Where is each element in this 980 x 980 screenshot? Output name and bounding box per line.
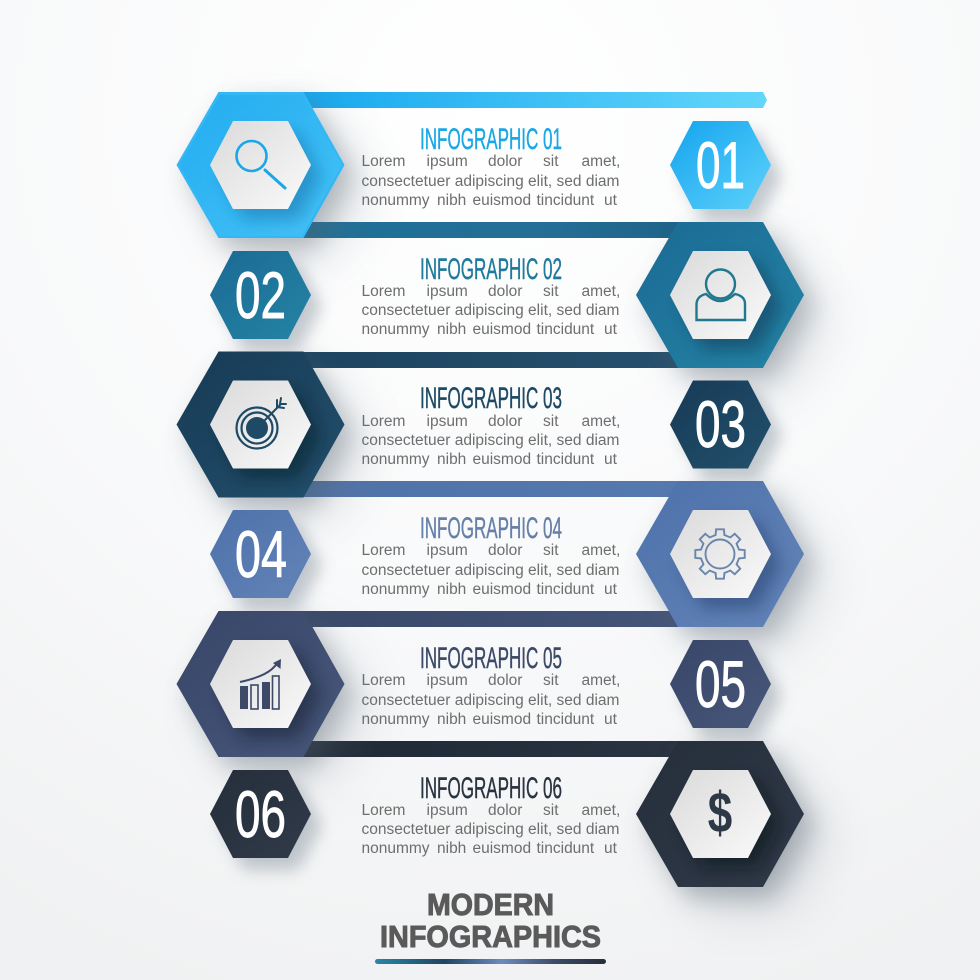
row 4 text block: Lorem (362, 542, 405, 559)
row 6 text block: ut (604, 840, 618, 857)
connector bar 3 (300, 352, 690, 368)
row 6 text block: INFOGRAPHIC 06 (420, 772, 562, 805)
row 1 right small number hexagon: 01 (696, 128, 745, 202)
row 3 right small number hexagon: 03 (695, 387, 746, 461)
row 1 text block: euismod (472, 192, 531, 209)
row 1 text block: sit (543, 153, 559, 170)
title underline (375, 959, 606, 964)
row 5 text block: nibh (437, 711, 466, 728)
icon: target (236, 398, 286, 448)
row 6 left small number hexagon: 06 (235, 777, 286, 851)
row 5 right small number hexagon (670, 640, 782, 740)
row 5 text block: nonummy (362, 711, 430, 728)
row 2 text block: ipsum (426, 283, 468, 300)
row 5 text block: euismod (472, 711, 531, 728)
row 1 text block: dolor (488, 153, 522, 170)
row 2 text block: euismod (472, 321, 531, 338)
row 4 text block: ipsum (426, 542, 468, 559)
row 5 text block: ut (604, 711, 618, 728)
row 2 text block: tincidunt (536, 321, 595, 338)
row 3 text block: tincidunt (536, 451, 595, 468)
row 3 text block: nonummy (362, 451, 430, 468)
row 1 text block (362, 123, 620, 209)
connector bar 6 (300, 741, 690, 757)
icon: dollar sign: $ (708, 780, 732, 844)
icon: gear (695, 529, 745, 579)
row 6 text block: tincidunt (536, 840, 595, 857)
row 2 left small number hexagon (210, 251, 322, 351)
row 2 text block: INFOGRAPHIC 02 (420, 253, 562, 286)
row 4 text block (362, 512, 620, 598)
icon: magnifier (236, 141, 285, 188)
row 6 text block: amet, (582, 802, 620, 819)
icon: growth chart (240, 659, 281, 709)
row 3 text block: nibh (437, 451, 466, 468)
row 5 text block: Lorem (362, 672, 405, 689)
row 2 text block: ut (604, 321, 618, 338)
row 5 text block: consectetuer adipiscing elit, sed diam (362, 692, 620, 709)
row 4 text block: amet, (582, 542, 620, 559)
row 1 left big hexagon with magnifier icon (176, 92, 369, 261)
row 3 text block: amet, (582, 413, 620, 430)
row 1 text block: consectetuer adipiscing elit, sed diam (362, 173, 620, 190)
icon: person (696, 270, 745, 320)
connector bar 5 (300, 611, 690, 627)
row 3 left big hexagon with target icon (176, 352, 369, 520)
row 5 text block: ipsum (426, 672, 468, 689)
row 2 right big hexagon with person icon (636, 222, 829, 391)
row 5 text block: dolor (488, 672, 522, 689)
row 3 text block: INFOGRAPHIC 03 (420, 382, 562, 415)
row 4 right big hexagon with gear icon (636, 481, 829, 650)
row 4 text block: euismod (472, 581, 531, 598)
row 4 text block: sit (543, 542, 559, 559)
row 5 text block: amet, (582, 672, 620, 689)
row 2 text block: dolor (488, 283, 522, 300)
title: modern infographics (380, 887, 601, 954)
row 5 text block: tincidunt (536, 711, 595, 728)
row 3 text block: ut (604, 451, 618, 468)
row 2 text block: consectetuer adipiscing elit, sed diam (362, 302, 620, 319)
row 5 left big hexagon with chart icon (176, 611, 369, 780)
row 3 text block: dolor (488, 413, 522, 430)
row 1 text block: nonummy (362, 192, 430, 209)
row 2 text block: amet, (582, 283, 620, 300)
row 6 text block: sit (543, 802, 559, 819)
row 3 text block: euismod (472, 451, 531, 468)
connector bar 2 (300, 222, 690, 238)
row 4 text block: ut (604, 581, 618, 598)
row 4 text block: consectetuer adipiscing elit, sed diam (362, 562, 620, 579)
row 2 text block: sit (543, 283, 559, 300)
row 6 text block (362, 772, 620, 857)
row 3 text block: consectetuer adipiscing elit, sed diam (362, 432, 620, 449)
row 1 text block: ut (604, 192, 618, 209)
row 6 text block: nonummy (362, 840, 430, 857)
row 1 right small number hexagon (670, 121, 782, 221)
row 5 text block (362, 642, 620, 728)
row 2 text block: nonummy (362, 321, 430, 338)
row 4 text block: nibh (437, 581, 466, 598)
row 2 text block: Lorem (362, 283, 405, 300)
connector bar 1 (300, 92, 767, 108)
connector bar 4 (300, 481, 690, 497)
row 2 left small number hexagon: 02 (235, 258, 286, 332)
row 3 text block: Lorem (362, 413, 405, 430)
row 4 text block: dolor (488, 542, 522, 559)
row 3 text block: ipsum (426, 413, 468, 430)
row 6 text block: nibh (437, 840, 466, 857)
row 4 text block: nonummy (362, 581, 430, 598)
row 1 text block: Lorem (362, 153, 405, 170)
row 5 text block: INFOGRAPHIC 05 (420, 642, 562, 675)
row 6 right big hexagon with dollar icon (636, 741, 829, 910)
title: modern infographics: INFOGRAPHICS (380, 919, 601, 954)
row 3 right small number hexagon (670, 380, 782, 480)
row 4 text block: INFOGRAPHIC 04 (420, 512, 562, 545)
row 4 text block: tincidunt (536, 581, 595, 598)
row 1 text block: nibh (437, 192, 466, 209)
row 6 text block: ipsum (426, 802, 468, 819)
row 1 text block: tincidunt (536, 192, 595, 209)
row 5 text block: sit (543, 672, 559, 689)
title: modern infographics: MODERN (427, 887, 554, 922)
row 2 text block: nibh (437, 321, 466, 338)
row 4 left small number hexagon (210, 510, 322, 610)
row 1 text block: ipsum (426, 153, 468, 170)
row 6 text block: consectetuer adipiscing elit, sed diam (362, 821, 620, 838)
row 6 left small number hexagon (210, 770, 322, 870)
row 5 right small number hexagon: 05 (695, 647, 746, 721)
row 6 text block: euismod (472, 840, 531, 857)
row 2 text block (362, 253, 620, 338)
row 6 text block: dolor (488, 802, 522, 819)
row 1 text block: amet, (582, 153, 620, 170)
row 4 left small number hexagon: 04 (235, 517, 287, 591)
row 3 text block (362, 382, 620, 468)
row 1 text block: INFOGRAPHIC 01 (420, 123, 562, 156)
row 3 text block: sit (543, 413, 559, 430)
row 6 text block: Lorem (362, 802, 405, 819)
